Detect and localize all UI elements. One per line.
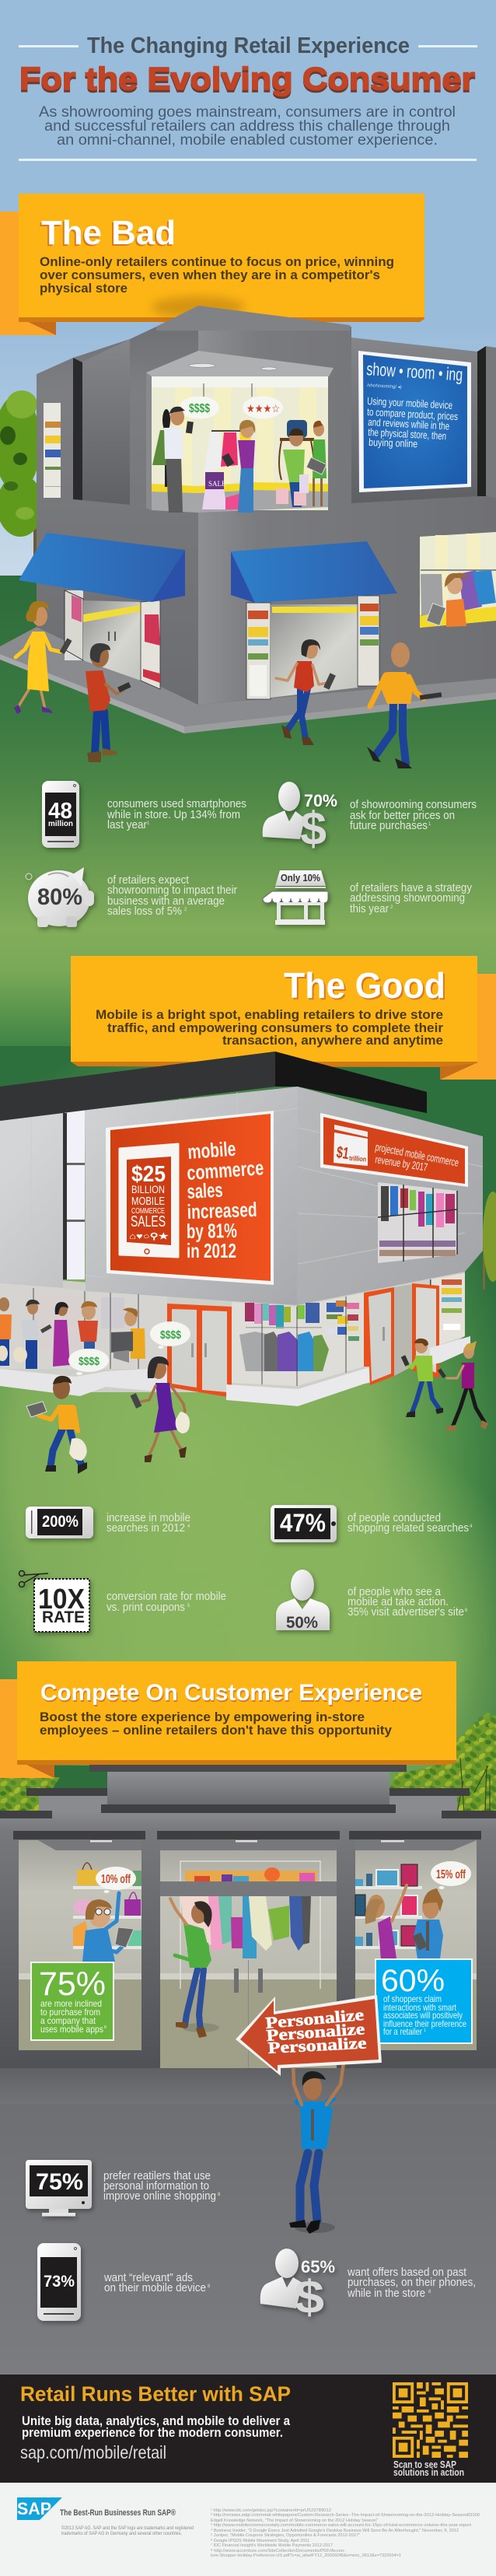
glass gap bbox=[63, 1110, 85, 1279]
showrooming billboard bbox=[358, 351, 471, 492]
panel: the good bbox=[71, 956, 477, 1067]
stat box: 75%: uses mobile apps bbox=[40, 2024, 103, 2035]
stat text: improve online shopping bbox=[103, 2190, 216, 2203]
thought bubble: 15% off bbox=[431, 1861, 471, 1889]
billboard claim: in 2012 bbox=[187, 1239, 236, 1262]
stat text: on their mobile device bbox=[104, 2282, 206, 2294]
stat text bbox=[348, 1586, 468, 1619]
main front panel bbox=[85, 1087, 298, 1305]
panel: compete on customer experience bbox=[17, 1661, 456, 1765]
icon: man with dollar 70%: $ bbox=[300, 803, 327, 855]
icon: horizontal phone 47% bbox=[271, 1505, 337, 1542]
references bbox=[211, 2508, 480, 2558]
person: associate man bbox=[412, 1888, 443, 1958]
url: sap.com/mobile/retail bbox=[20, 2442, 166, 2462]
stat box: 75%: a company that bbox=[40, 2015, 96, 2026]
stats: personalize bbox=[26, 2160, 476, 2323]
price bubble bbox=[179, 383, 219, 418]
references: ⁵ Juniper, "Mobile Coupons Strategies, Opportunities & Forecasts 2012-2017" bbox=[211, 2532, 360, 2538]
icon: horizontal phone 200%: 200% bbox=[42, 1513, 79, 1531]
stats: the bad bbox=[26, 781, 477, 927]
right face bbox=[297, 1087, 483, 1305]
upper right display window bbox=[378, 1182, 457, 1263]
intro paragraph: As showrooming goes mainstream, consumers are in control bbox=[39, 104, 456, 121]
references: ⁴ Business Insider, "3 Google Execs Just Admitted Google's Desktop Business Will Soon Be An Afterthought," November, 9, 2012 bbox=[211, 2528, 459, 2533]
intro paragraph: and successful retailers can address this challenge through bbox=[44, 118, 450, 135]
stat text: this year bbox=[350, 903, 389, 915]
thought bubble: 15% off: 15% off bbox=[436, 1868, 466, 1881]
store one building bbox=[0, 306, 496, 733]
right doors bbox=[364, 1273, 465, 1385]
person: woman in red top bbox=[276, 639, 336, 745]
stat box: 75%: 8 bbox=[104, 2025, 107, 2030]
heading: The Good bbox=[284, 965, 445, 1006]
stat box: 60%: of shoppers claim bbox=[383, 1993, 442, 2004]
sale sign: SALE bbox=[208, 480, 226, 488]
thought bubble: prices: $$$$ bbox=[160, 1328, 182, 1342]
stat box: 75%: 75% bbox=[39, 1965, 106, 2003]
stat text bbox=[103, 2170, 221, 2203]
stat box: 60%: 1 bbox=[424, 2028, 426, 2033]
stat box: 60%: influence their preference bbox=[383, 2018, 466, 2029]
tree right bbox=[483, 1192, 496, 1290]
glasses woman with tablet bbox=[426, 573, 467, 627]
icon: phone 48 million bbox=[42, 781, 79, 848]
stat text: purchases, on their phones, bbox=[348, 2277, 476, 2289]
description bbox=[40, 255, 394, 296]
stat box: 75%: are more inclined bbox=[40, 1998, 102, 2009]
description: over consumers, even when they are in a competitor's bbox=[40, 268, 380, 282]
stat text: 1 bbox=[428, 822, 431, 827]
orange side sign bbox=[320, 1113, 468, 1187]
stat text bbox=[350, 882, 473, 915]
thought bubble: 10% off bbox=[96, 1867, 136, 1893]
billboard claim bbox=[186, 1137, 264, 1262]
man at computer bbox=[111, 1308, 145, 1363]
icon: piggy bank 80% bbox=[26, 867, 94, 927]
right awning bbox=[231, 541, 397, 603]
stat text: of people conducted bbox=[348, 1512, 441, 1524]
middle clothes display bbox=[232, 1293, 364, 1386]
stat text: want offers based on past bbox=[347, 2266, 466, 2279]
icon: tablet with sales figure: COMMERCE bbox=[131, 1207, 165, 1216]
copyright bbox=[61, 2525, 194, 2536]
stat text: shopping related searches bbox=[348, 1522, 469, 1535]
icon: tablet with sales figure: BILLION bbox=[131, 1183, 165, 1195]
store front left windows bbox=[0, 1283, 167, 1370]
references: ⁸ http://www.accenture.com/SiteCollectionDocuments/PDF/Accen- bbox=[211, 2548, 345, 2553]
icon: horizontal phone 47%: 47% bbox=[280, 1509, 326, 1537]
thought bubble: prices bbox=[150, 1321, 190, 1349]
stat box: 60%: 60% bbox=[381, 1964, 445, 1998]
shopper woman green dress bbox=[306, 421, 327, 506]
thought bubble: 10% off: 10% off bbox=[101, 1873, 131, 1886]
person: man in green hoodie bbox=[401, 1339, 443, 1417]
intro paragraph: an omni-channel, mobile enabled customer experience. bbox=[57, 132, 438, 149]
recessed right wall bbox=[351, 338, 477, 503]
stat text bbox=[350, 799, 477, 832]
billboard claim: by 81% bbox=[187, 1219, 237, 1243]
stat box: 60%: for a retailer bbox=[383, 2026, 422, 2037]
centre door bbox=[160, 1840, 337, 2068]
stat text: 2 bbox=[390, 905, 393, 910]
stat text: of people who see a bbox=[348, 1586, 442, 1598]
person: woman in magenta top bbox=[438, 1341, 488, 1431]
stat text: of showrooming consumers bbox=[350, 799, 477, 811]
icon: man with dollar 65%: 65% bbox=[301, 2257, 335, 2277]
icon: tablet with sales figure: MOBILE bbox=[131, 1195, 165, 1208]
stat text: want “relevant” ads bbox=[103, 2272, 193, 2284]
references: ⁶ Google IPSOS Mobile Movement Study, April 2011 bbox=[211, 2538, 309, 2543]
stat text bbox=[107, 798, 246, 831]
description: traffic, and empowering consumers to complete their bbox=[107, 1021, 444, 1035]
stat box: 60%: interactions with smart bbox=[383, 2002, 457, 2013]
stat text: last year bbox=[107, 819, 147, 831]
references: Edgell Knowledge Network, "The Impact of Showrooming on the 2012 Holiday Season" bbox=[211, 2518, 378, 2523]
lower floor background bbox=[0, 2104, 496, 2375]
QR caption: solutions in action bbox=[393, 2467, 464, 2478]
shopper man with phone bbox=[164, 407, 194, 513]
stat text: while in store. Up 134% from bbox=[107, 809, 240, 821]
sidewalk bbox=[0, 2068, 496, 2104]
person: man holding sign bbox=[289, 2063, 344, 2234]
description: employees – online retailers don't have this opportunity bbox=[40, 1724, 393, 1738]
icon: tablet with sales figure: ⌂♥○⚲★ bbox=[129, 1232, 169, 1241]
icon: man with dollar 65% bbox=[260, 2249, 335, 2323]
panel: the bad ribbon bbox=[0, 212, 56, 335]
person: man in red shirt bbox=[86, 643, 131, 762]
icon: piggy bank 80%: 80% bbox=[37, 884, 82, 910]
intro paragraph bbox=[39, 104, 456, 149]
bushes behind store three bbox=[0, 1711, 496, 1816]
sill left bbox=[0, 1369, 167, 1396]
stat text: mobile ad take action. bbox=[348, 1596, 449, 1608]
heading: The Bad bbox=[41, 214, 176, 252]
stat text: of retailers have a strategy bbox=[350, 882, 473, 894]
stat text: business with an average bbox=[107, 895, 225, 908]
description: Online-only retailers continue to focus on price, winning bbox=[40, 255, 394, 269]
stat text: of retailers expect bbox=[107, 874, 189, 887]
left awning bbox=[19, 533, 185, 602]
icon: coupon 10x rate: 10X bbox=[38, 1583, 85, 1615]
left upper narrow window bbox=[44, 403, 61, 498]
store one roof overlapping panel bbox=[156, 306, 350, 331]
icon: tablet with sales figure: $25 bbox=[131, 1162, 166, 1187]
references: ture-Shopper-Holiday-Preference-US.pdf?c=ai_attwtFY12_20000245&n=smc_0612&s=7322654=1 bbox=[211, 2553, 401, 2558]
icon: man with dollar 65%: $ bbox=[295, 2271, 324, 2323]
icon: phone 73%: 73% bbox=[44, 2273, 75, 2291]
roof right bbox=[275, 1052, 427, 1113]
sky background bbox=[0, 0, 496, 591]
person: woman in yellow dress bbox=[14, 601, 72, 714]
billboard claim: sales bbox=[187, 1178, 223, 1203]
stat text: future purchases bbox=[350, 820, 428, 832]
stat text: searches in 2012 bbox=[107, 1522, 185, 1535]
references: ³ http://www.mobilecommercedaily.com/mobile-commerce-sales-will-account-for-15pc-of-total-ecommerce-volume-this-year-report bbox=[211, 2523, 471, 2528]
description: physical store bbox=[40, 282, 127, 296]
right wall bbox=[198, 306, 496, 705]
stat text bbox=[103, 2272, 211, 2294]
icon: phone 73% bbox=[37, 2243, 81, 2321]
icon: tablet with sales figure: SALES bbox=[131, 1213, 166, 1230]
stat box: 75% bbox=[31, 1962, 114, 2040]
store base backing bbox=[0, 1268, 465, 1392]
black fin right bbox=[477, 346, 486, 496]
stat text: showrooming to impact their bbox=[107, 884, 237, 897]
left wall bbox=[37, 306, 198, 705]
person: bald man in yellow sweater bbox=[367, 642, 442, 768]
icon: phone 48 million: 48 bbox=[48, 799, 72, 824]
icon: man with dollar 70% bbox=[263, 782, 337, 855]
icon: phone 48 million: million bbox=[48, 819, 73, 828]
icon: horizontal phone 200% bbox=[26, 1507, 93, 1538]
person: shopper reaching for clothes bbox=[170, 1899, 219, 2038]
person: associate with tablet bbox=[82, 1893, 134, 1962]
shopper woman with tablet bbox=[222, 420, 255, 513]
stat text: ask for better prices on bbox=[350, 810, 455, 822]
references: ² http://rsrnews.edgl.com/retail-whitepapers/Custom-Research-Series--The-Impact-of-Showrooming-on-the-2012-Holiday-Season83100 bbox=[211, 2513, 480, 2518]
stat text: conversion rate for mobile bbox=[107, 1591, 226, 1603]
thought bubble: prices: $$$$ bbox=[79, 1355, 100, 1368]
person: shopper woman from behind bbox=[365, 1885, 407, 1960]
showrooming billboard: /shohrooming/ ◂) bbox=[367, 383, 402, 390]
arrow sign: personalize: Personalize bbox=[267, 2033, 367, 2057]
clothes on rail bbox=[204, 430, 252, 476]
person: woman in purple dress bbox=[131, 1356, 190, 1462]
transom bbox=[160, 1881, 337, 1896]
review bubble: ★★★☆ bbox=[246, 402, 280, 415]
stat box: 60% bbox=[375, 1959, 472, 2043]
stat text: addressing showrooming bbox=[350, 892, 465, 905]
references: ¹ http://www.idc.com/getdoc.jsp?containerId=prUS23789012 bbox=[211, 2508, 331, 2513]
stat text: 8 bbox=[208, 2284, 211, 2289]
icon: man with dollar 70%: 70% bbox=[304, 791, 337, 810]
facade left panels bbox=[0, 1113, 63, 1288]
icon: credit card: $1 bbox=[335, 1143, 351, 1163]
stat text: 5 bbox=[187, 1604, 190, 1608]
stat text bbox=[348, 1512, 473, 1535]
window header bars bbox=[13, 1831, 481, 1839]
description: transaction, anywhere and anytime bbox=[222, 1034, 443, 1048]
description bbox=[22, 2413, 290, 2440]
door handles bbox=[234, 1969, 263, 1993]
price bubble: $$$$ bbox=[189, 402, 210, 415]
stat text: personal information to bbox=[103, 2180, 209, 2193]
arrow sign: personalize bbox=[236, 1995, 382, 2076]
heading: Retail Runs Better with SAP bbox=[20, 2382, 291, 2406]
tree behind the first store bbox=[0, 390, 44, 579]
orange side sign: revenue by 2017 bbox=[375, 1153, 428, 1174]
icon: monitor 75%: 75% bbox=[36, 2169, 83, 2195]
icon: store only 10% bbox=[263, 870, 328, 925]
billboard claim: commerce bbox=[186, 1156, 264, 1185]
heading: Compete On Customer Experience bbox=[40, 1680, 422, 1706]
left awning storefront bbox=[65, 590, 160, 689]
sale sign bbox=[202, 472, 227, 509]
stat text: 35% visit advertiser's site bbox=[348, 1606, 464, 1619]
stat text: while in the store bbox=[347, 2287, 425, 2300]
QR caption bbox=[393, 2459, 464, 2478]
bags bbox=[225, 492, 249, 509]
stat box: 60%: associates will positively bbox=[383, 2010, 463, 2021]
person: boy with tablet bbox=[26, 1376, 87, 1474]
logo: SAP bbox=[17, 2497, 62, 2520]
description: Boost the store experience by empowering in-store bbox=[40, 1710, 365, 1724]
icon: person 50% bbox=[276, 1570, 330, 1632]
arrow sign: personalize: Personalize bbox=[266, 2019, 365, 2045]
showrooming billboard: buying online bbox=[369, 436, 417, 450]
stat text: prefer reatilers that use bbox=[103, 2170, 211, 2182]
showrooming billboard: to compare product, prices bbox=[367, 406, 459, 422]
stat text: 8 bbox=[218, 2193, 221, 2197]
stat text bbox=[347, 2266, 476, 2300]
shelves with handbags bbox=[73, 1863, 141, 1949]
stat text: 4 bbox=[187, 1524, 190, 1529]
icon: person 50%: 50% bbox=[286, 1614, 318, 1632]
thought bubble: prices bbox=[68, 1349, 109, 1375]
stat box: 75%: to purchase from bbox=[40, 2007, 100, 2018]
in-store figures bbox=[0, 1297, 98, 1369]
billboard claim: mobile bbox=[187, 1137, 236, 1164]
icon: credit card: trillion bbox=[349, 1154, 367, 1164]
stats: the good bbox=[19, 1505, 473, 1632]
clothes rack bbox=[180, 1861, 320, 1989]
table with handbag bbox=[279, 420, 314, 480]
header bbox=[19, 33, 477, 161]
copyright: trademarks of SAP AG in Germany and several other countries. bbox=[61, 2531, 182, 2536]
stat text: 6 bbox=[465, 1608, 468, 1613]
black fin left bbox=[73, 358, 82, 500]
call to action band bbox=[0, 2375, 496, 2483]
panel: the good ribbon bbox=[440, 974, 496, 1080]
mannequin and skirt bbox=[152, 409, 180, 487]
description: Mobile is a bright spot, enabling retailers to drive store bbox=[96, 1008, 443, 1022]
arrow sign: personalize: Personalize bbox=[264, 2005, 365, 2032]
title line 2: For the Evolving Consumer bbox=[19, 61, 475, 96]
upper corner display window bbox=[146, 351, 334, 513]
sill middle bbox=[226, 1367, 369, 1406]
copyright: ©2013 SAP AG. SAP and the SAP logo are trademarks and registered bbox=[61, 2525, 194, 2531]
stat text bbox=[107, 1591, 226, 1614]
recessed left wall bbox=[82, 339, 130, 505]
showrooming billboard: the physical store, then bbox=[368, 426, 446, 442]
stat text: sales loss of 5% bbox=[107, 905, 182, 918]
description bbox=[40, 1710, 393, 1738]
QR code bbox=[393, 2382, 468, 2458]
store two building bbox=[0, 1052, 496, 1406]
shelves with devices bbox=[355, 1864, 422, 1949]
roof left bbox=[0, 1052, 275, 1121]
right window bbox=[355, 1840, 477, 2050]
title line 1: The Changing Retail Experience bbox=[87, 33, 410, 58]
stat text bbox=[107, 1512, 190, 1535]
orange billboard bbox=[106, 1111, 274, 1285]
icon: coupon 10x rate bbox=[19, 1571, 89, 1632]
description bbox=[96, 1008, 444, 1048]
description: premium experience for the modern consumer. bbox=[22, 2425, 283, 2440]
store three facade bbox=[0, 1763, 496, 2104]
stat text: vs. print coupons bbox=[107, 1601, 185, 1614]
panel: the bad bbox=[19, 194, 424, 322]
double door bbox=[167, 1304, 232, 1398]
showrooming billboard: Using your mobile device bbox=[367, 395, 452, 411]
lower right display window bbox=[420, 532, 496, 628]
shopping bags pile bbox=[276, 474, 309, 506]
stat text: consumers used smartphones bbox=[107, 798, 246, 810]
references: ⁷ IDC Financial Insight's Worldwide Mobile Payments 2012-2017 bbox=[211, 2543, 333, 2548]
stat text: 2 bbox=[184, 908, 187, 912]
shopper man green bbox=[283, 429, 305, 507]
store two roof overlapping panel bbox=[0, 1052, 427, 1121]
tagline: The Best-Run Businesses Run SAP® bbox=[60, 2508, 176, 2518]
sidewalk bbox=[0, 627, 496, 726]
icon: store only 10%: Only 10% bbox=[281, 872, 320, 884]
footer bbox=[0, 2483, 496, 2576]
stat text: 1 bbox=[147, 821, 150, 826]
stat text: increase in mobile bbox=[107, 1512, 190, 1524]
right awning storefront bbox=[246, 596, 379, 699]
showrooming billboard: and reviews while in the bbox=[368, 416, 449, 432]
left window bbox=[19, 1840, 141, 2050]
icon: coupon 10x rate: RATE bbox=[42, 1608, 85, 1626]
logo: SAP: SAP bbox=[17, 2499, 51, 2518]
description: Unite big data, analytics, and mobile to deliver a bbox=[22, 2413, 290, 2428]
icon: tablet with sales figure bbox=[120, 1144, 178, 1257]
QR caption: Scan to see SAP bbox=[393, 2459, 456, 2470]
review bubble bbox=[243, 383, 283, 418]
billboard claim: increased bbox=[187, 1198, 257, 1223]
stat text: 8 bbox=[428, 2290, 431, 2294]
stat text bbox=[107, 874, 237, 918]
panel: compete ribbon bbox=[0, 1679, 54, 1778]
ground background bbox=[0, 576, 496, 1824]
icon: credit card bbox=[334, 1125, 368, 1166]
stat text: 4 bbox=[470, 1524, 473, 1529]
icon: monitor 75% bbox=[26, 2160, 92, 2217]
